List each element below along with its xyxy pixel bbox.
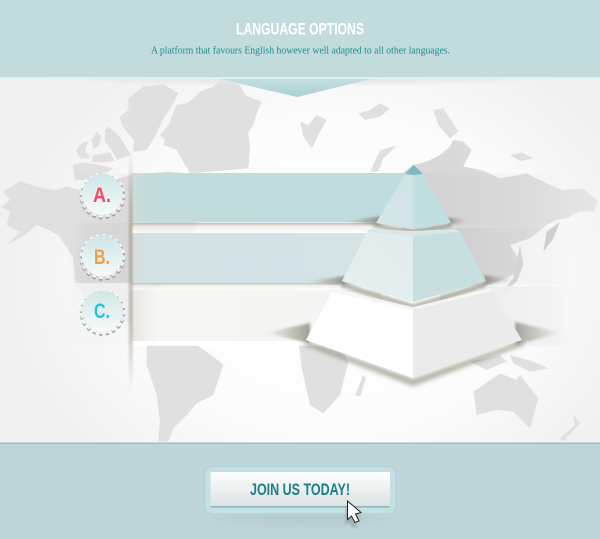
band B [132,233,382,283]
right overlay strips [415,173,575,346]
badge letter C: C. [94,300,110,323]
tier: top [376,165,451,229]
map: eastern hemisphere [298,103,598,441]
pyramid cap [405,165,423,175]
badge letter B: B. [94,246,110,269]
vertical shadow edge [129,150,132,390]
tier: middle [342,229,486,302]
world map [1,80,598,442]
badge C [81,290,124,334]
subtitle: A platform that favours English however well adapted to all other languages. [151,44,450,56]
button label: JOIN US TODAY! [250,481,350,499]
title: LANGUAGE OPTIONS [236,20,364,38]
map: western hemisphere [1,80,262,442]
map background panel [0,79,600,443]
band gaps [132,223,402,290]
icon: mouse cursor [345,501,361,528]
header band [0,0,600,93]
band A [132,173,412,222]
footer band [0,442,600,539]
tier: base [306,288,522,378]
badge A [81,174,124,218]
pyramid [265,165,562,386]
under-band white glow [132,341,322,346]
header pointer triangle [220,79,371,97]
badge letter A: A. [93,184,111,207]
band C [132,290,382,341]
badge B [81,235,124,279]
call to action button [204,466,396,524]
pyramid shadows [265,216,562,386]
left overlay strips [68,173,132,345]
